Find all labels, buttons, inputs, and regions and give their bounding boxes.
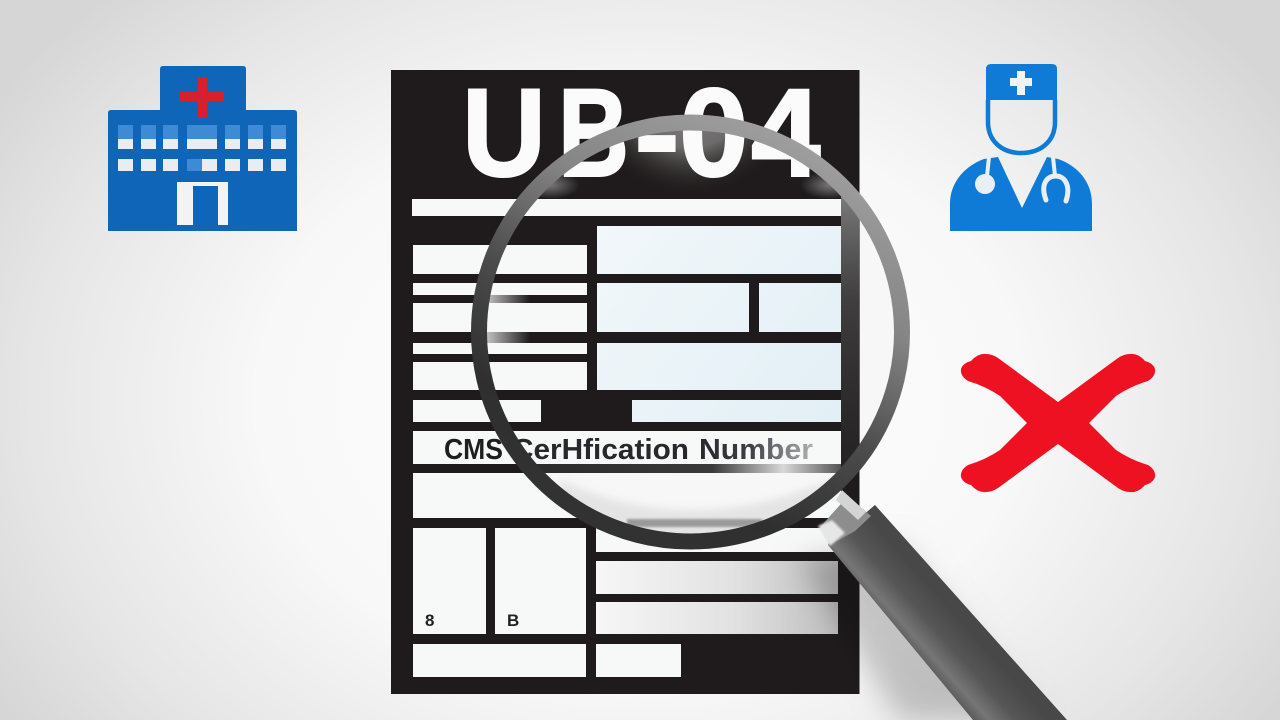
- handle shadow: [800, 545, 1040, 720]
- handle: [828, 505, 1067, 720]
- form fields: [412, 199, 841, 677]
- lens ring: [479, 122, 902, 542]
- field marks: [425, 611, 519, 630]
- form number label: CerHfication: [512, 434, 689, 466]
- field marks: B: [507, 611, 519, 630]
- form title: 4: [751, 64, 821, 203]
- lens interior: [487, 196, 860, 534]
- magnifying glass: [479, 120, 1067, 720]
- icon: doctor: [950, 64, 1092, 231]
- collar: [822, 496, 871, 545]
- form title: 0: [679, 64, 749, 203]
- tinted fields: [597, 226, 841, 422]
- shaded fields: [596, 561, 838, 634]
- form number label: Number: [699, 434, 813, 466]
- form title: -: [634, 64, 680, 203]
- icon: hospital: [108, 66, 297, 231]
- form title: B: [558, 64, 629, 203]
- UB-04 form: [391, 64, 860, 694]
- form number label: [444, 434, 813, 466]
- form title: U: [462, 64, 546, 203]
- lens shading behind title: [540, 130, 841, 198]
- form number label: CMS: [444, 434, 503, 466]
- field marks: 8: [425, 611, 434, 630]
- icon: red X: [961, 354, 1155, 492]
